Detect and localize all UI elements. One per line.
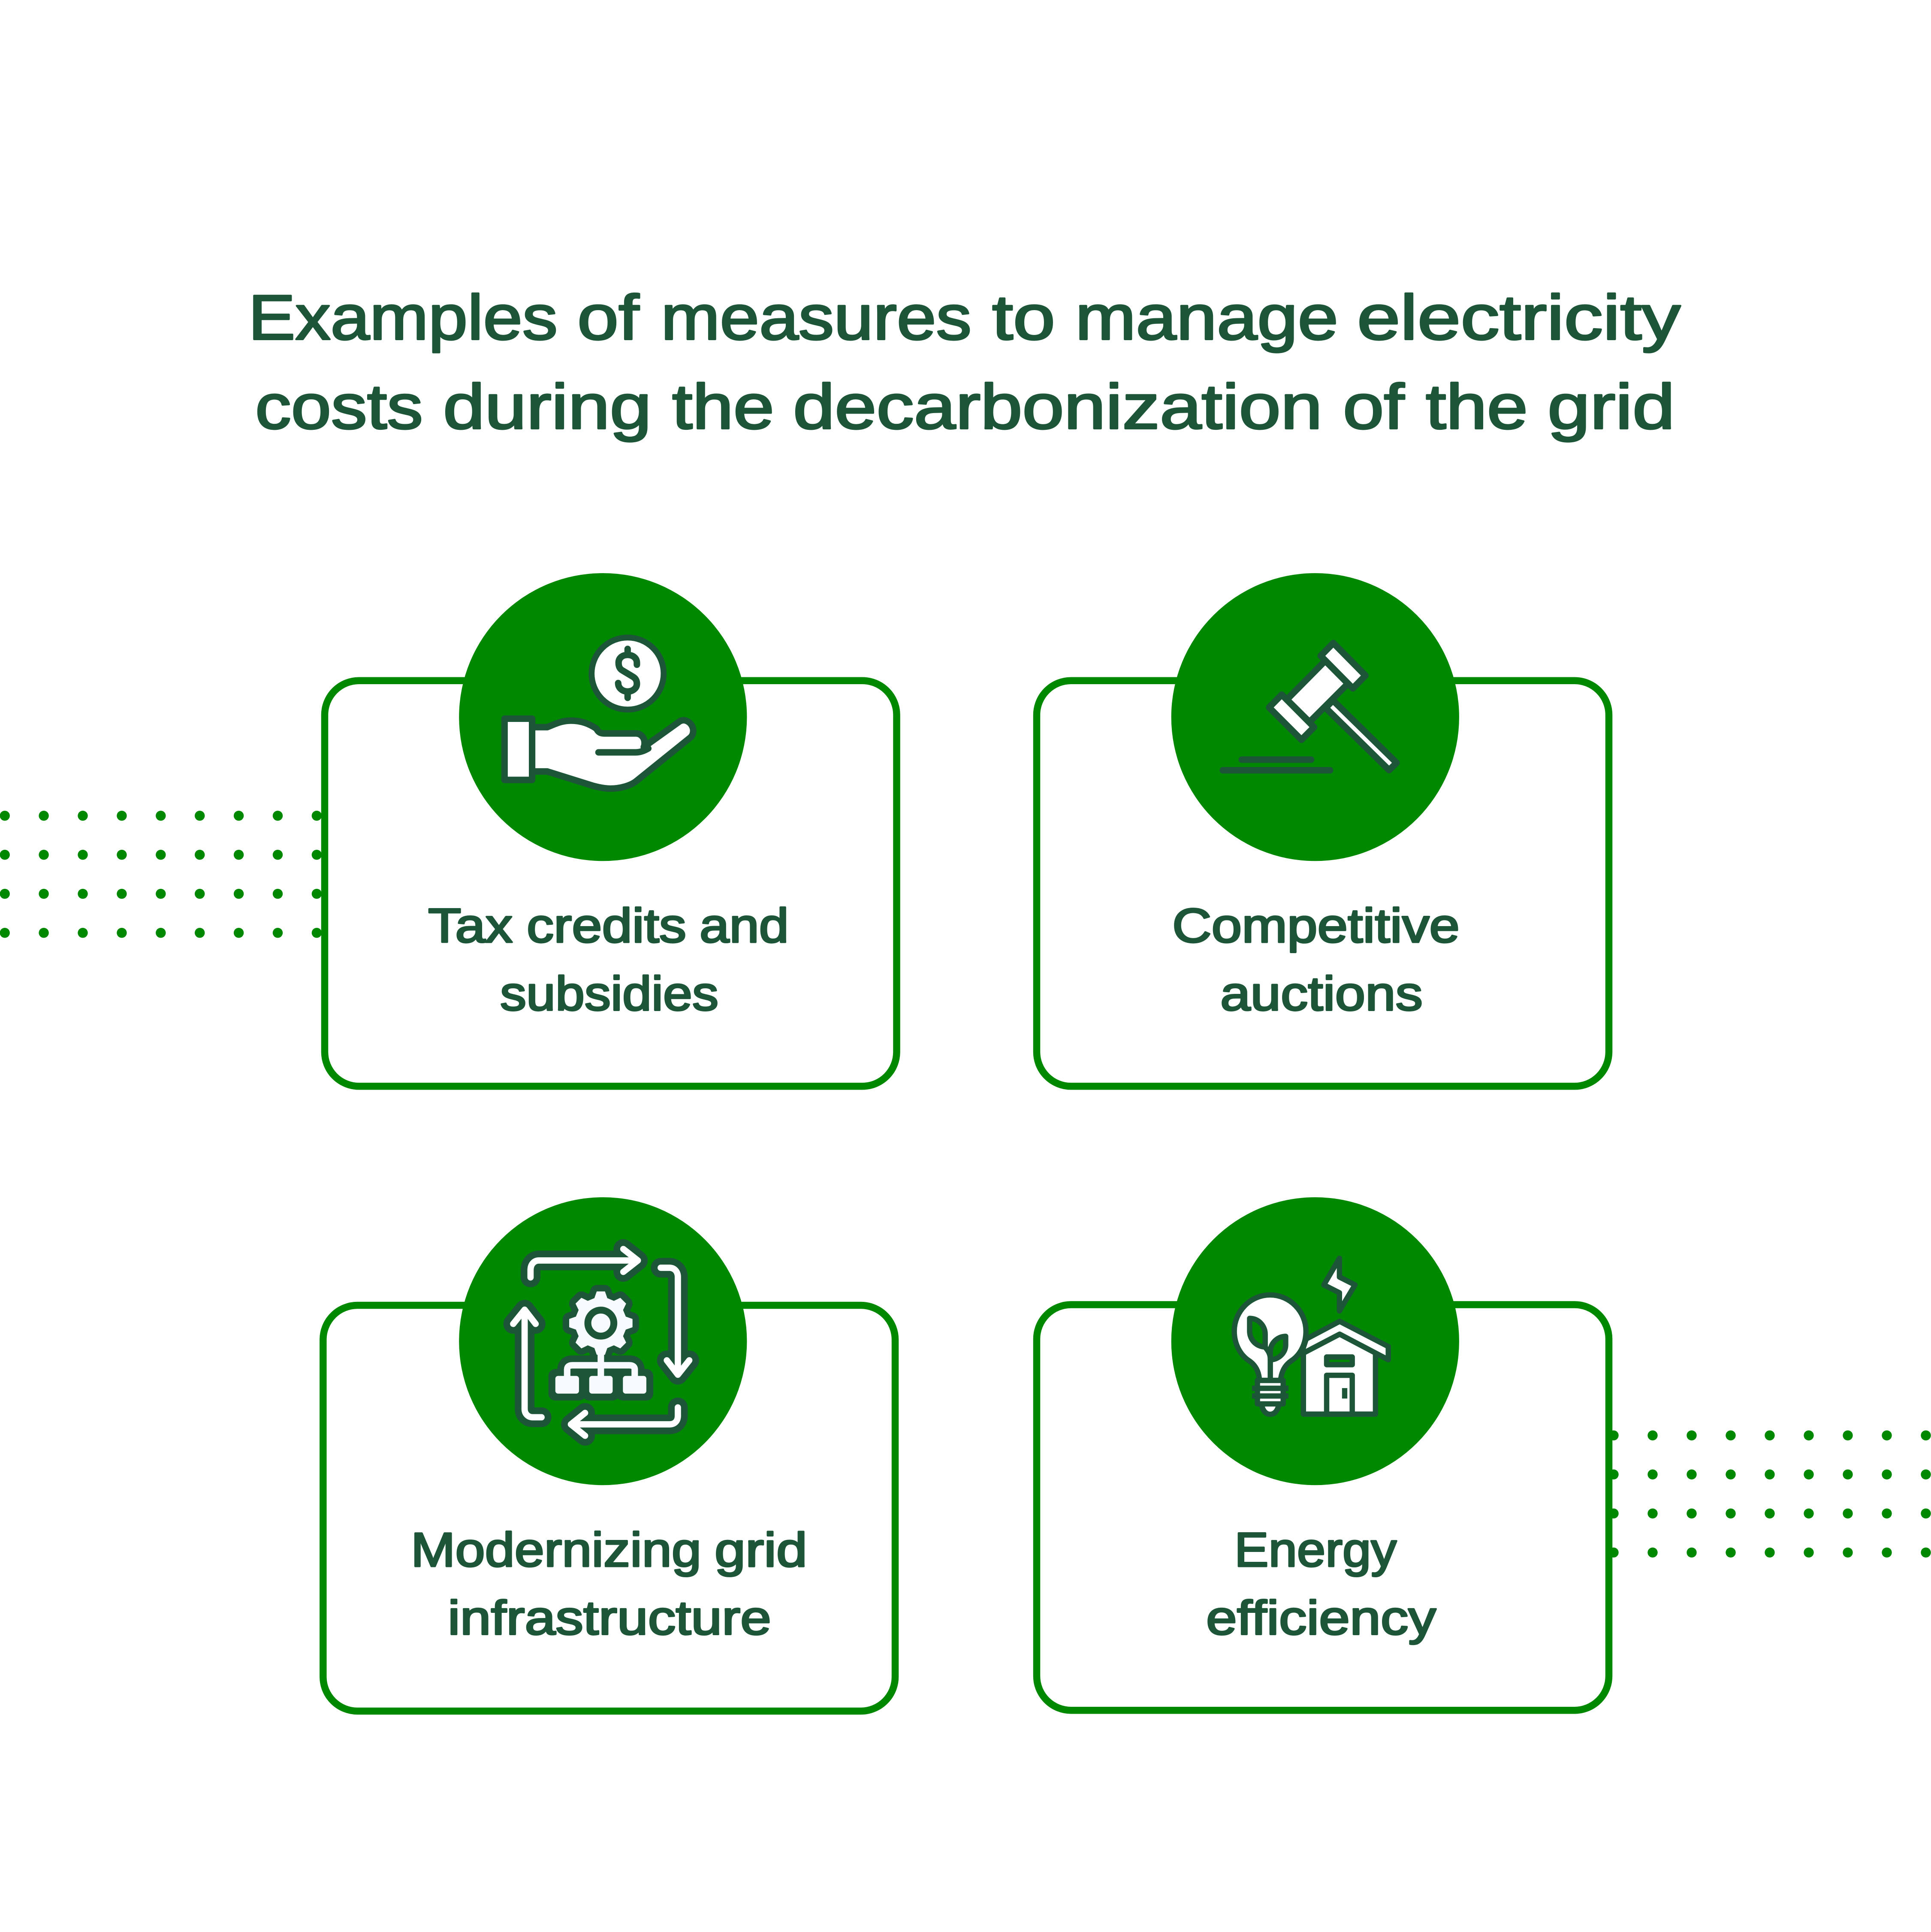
label: auctions <box>1220 967 1423 1020</box>
label: subsidies <box>500 967 718 1020</box>
icon: hand with dollar coin <box>504 637 693 788</box>
title: the <box>1426 371 1528 442</box>
title: of <box>577 282 640 353</box>
title: decarbonization <box>793 371 1322 442</box>
title: to <box>992 282 1055 353</box>
label <box>428 899 789 1020</box>
panel: tax credits and subsidies <box>325 573 896 1086</box>
label: Modernizing <box>411 1523 701 1577</box>
icon circle <box>459 1197 747 1485</box>
label: Competitive <box>1172 899 1460 953</box>
title <box>248 282 1681 442</box>
label: efficiency <box>1206 1591 1436 1645</box>
icon circle <box>459 573 747 861</box>
card outline <box>1037 681 1609 1086</box>
label: and <box>700 899 789 953</box>
panel: competitive auctions <box>1037 573 1609 1086</box>
label: credits <box>527 899 686 953</box>
icon: cycle arrows around gear and network <box>513 1249 689 1436</box>
dot pattern: left <box>5 816 322 933</box>
title: measures <box>661 282 972 353</box>
title: during <box>443 371 652 442</box>
icon: light bulb, house and lightning bolt <box>1234 1258 1388 1414</box>
label: Tax <box>428 899 513 953</box>
title: costs <box>255 371 423 442</box>
title: grid <box>1548 371 1675 442</box>
icon: gavel <box>1223 643 1397 770</box>
panel: energy efficiency <box>1037 1197 1609 1710</box>
title: the <box>672 371 774 442</box>
title: manage <box>1075 282 1338 353</box>
card outline <box>325 681 896 1086</box>
label: Energy <box>1234 1523 1397 1577</box>
panel: modernizing grid infrastructure <box>323 1197 895 1711</box>
icon circle <box>1171 573 1459 861</box>
icon circle <box>1171 1197 1459 1485</box>
label <box>1172 899 1460 1020</box>
label <box>411 1523 807 1645</box>
label: infrastructure <box>448 1591 771 1645</box>
title: of <box>1343 371 1405 442</box>
title: electricity <box>1357 282 1681 353</box>
title: Examples <box>248 282 558 353</box>
dot pattern: right <box>1614 1435 1928 1552</box>
label <box>1206 1523 1436 1645</box>
card outline <box>1037 1305 1609 1710</box>
card outline <box>323 1305 895 1711</box>
label: grid <box>715 1523 807 1577</box>
